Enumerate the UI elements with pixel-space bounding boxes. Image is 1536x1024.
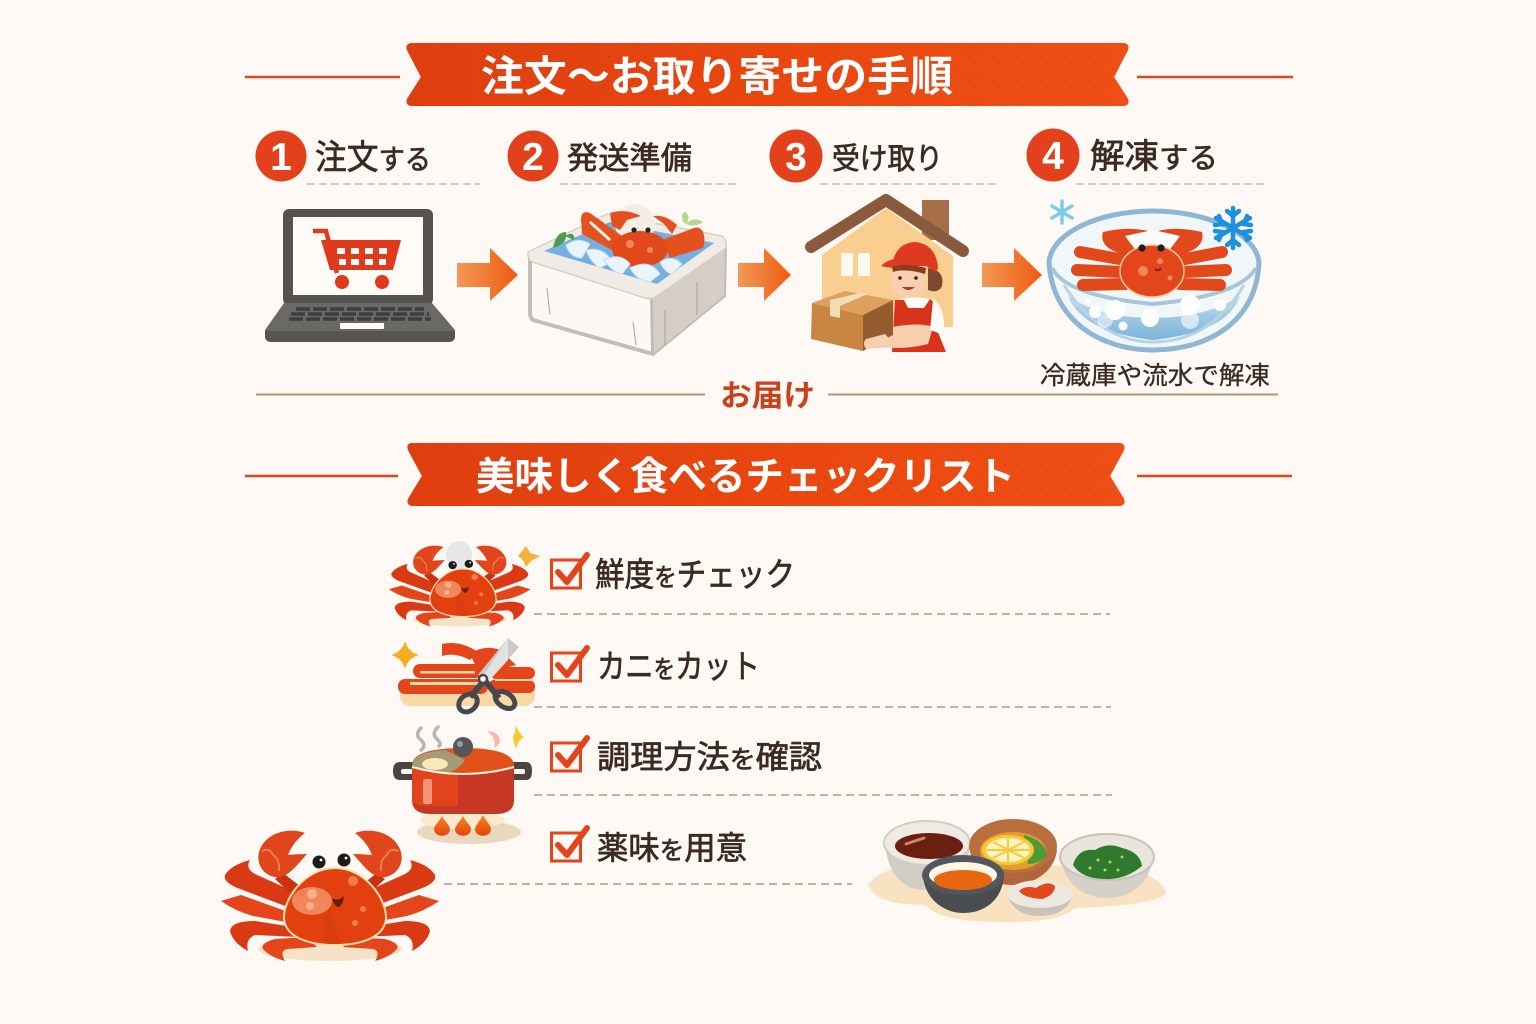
icon: pot on burner bbox=[393, 725, 532, 844]
icon: shopping cart bbox=[313, 231, 401, 289]
arrow: step 2 to 3 bbox=[738, 248, 791, 301]
step 3 heading: 3 bbox=[785, 136, 807, 179]
step 1 heading: 注文する bbox=[315, 139, 431, 177]
crab in bowl bbox=[1077, 229, 1226, 297]
step 2 heading: 発送準備 bbox=[567, 141, 692, 176]
separator bbox=[444, 883, 852, 885]
heading: ordering steps bbox=[245, 44, 1293, 105]
step 2 heading bbox=[508, 130, 737, 184]
icon: crab with chef hat bbox=[389, 541, 540, 626]
step 3 heading: 受け取り bbox=[832, 143, 943, 176]
bowl: greens bbox=[1060, 834, 1154, 898]
icon: house with delivery person bbox=[811, 200, 963, 352]
icon: large snowflake bbox=[1215, 208, 1251, 248]
crushed ice bbox=[566, 240, 682, 282]
arrow: step 1 to 2 bbox=[457, 248, 518, 301]
parcel bbox=[811, 291, 893, 351]
step 4 heading: 解凍する bbox=[1090, 138, 1218, 176]
step 1 heading: 1 bbox=[270, 136, 292, 179]
scissors bbox=[455, 638, 519, 716]
icon: crab thawing in glass bowl bbox=[1049, 201, 1259, 350]
icon: condiment bowls bbox=[868, 819, 1166, 922]
separator bbox=[534, 613, 1110, 615]
heading: ordering steps: 注文〜お取り寄せの手順 bbox=[481, 53, 953, 100]
delivery divider: お届け bbox=[720, 380, 815, 413]
separator bbox=[534, 794, 1112, 796]
step 1 heading bbox=[256, 130, 480, 184]
step 2 heading: 2 bbox=[522, 136, 544, 179]
checklist item 3: 調理方法を確認 bbox=[597, 739, 822, 775]
bowl: dark sauce bbox=[884, 821, 970, 890]
step 4 heading: 4 bbox=[1042, 135, 1064, 178]
delivery person bbox=[864, 242, 946, 352]
heading: checklist: 美味しく食べるチェックリスト bbox=[476, 456, 1015, 499]
icon: styrofoam box of crab on ice bbox=[528, 204, 726, 355]
small dish: red sauce bbox=[1007, 880, 1073, 916]
checklist item 1: 鮮度をチェック bbox=[595, 556, 795, 593]
separator bbox=[534, 706, 1111, 708]
icon: laptop with shopping cart bbox=[265, 209, 455, 342]
checklist item 4: 薬味を用意 bbox=[597, 830, 747, 866]
bowl: orange sauce bbox=[922, 855, 1004, 913]
icon: crab legs and scissors bbox=[391, 638, 535, 716]
icon: small snowflake bbox=[1052, 201, 1072, 223]
caption: thawing note: 冷蔵庫や流水で解凍 bbox=[1040, 362, 1270, 390]
step 4 heading bbox=[1026, 128, 1264, 184]
arrow: step 3 to 4 bbox=[982, 248, 1042, 301]
icon: large crab bbox=[221, 831, 439, 961]
heading: checklist bbox=[245, 444, 1292, 505]
step 3 heading bbox=[770, 130, 996, 184]
checklist item 2: カニをカット bbox=[597, 648, 760, 685]
bowl: lemon bbox=[969, 819, 1057, 885]
leaves bbox=[553, 232, 574, 248]
crab in box bbox=[581, 204, 704, 267]
